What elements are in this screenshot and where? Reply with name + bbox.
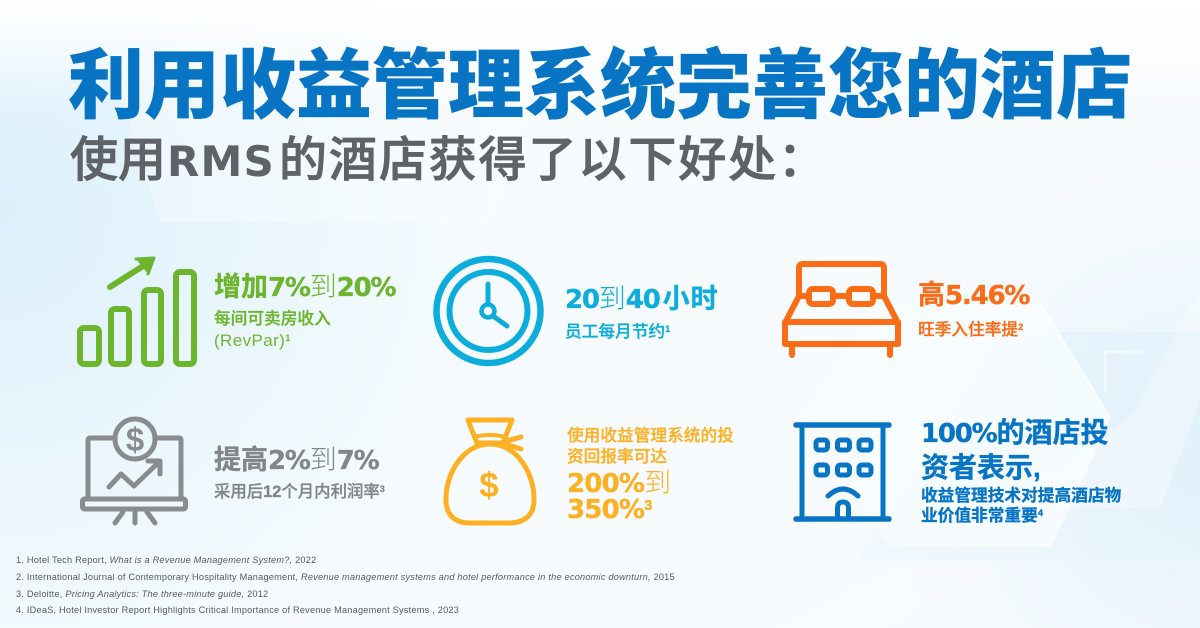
icon: presentation board with dollar: $ bbox=[126, 421, 144, 458]
text: RevPAR: (RevPar)1 bbox=[214, 331, 291, 350]
icon: hotel building bbox=[793, 422, 892, 522]
panel: occupancy bbox=[782, 261, 1030, 358]
text: roi intro: 资回报率可达 bbox=[567, 447, 667, 466]
heading: 100% of hotel investors bbox=[921, 417, 1109, 483]
footnote 2: 2. International Journal of Contemporary Hospitality Management, Revenue management systems and hotel performance in the economic downturn, 2015 bbox=[16, 572, 675, 582]
text: roi intro: 使用收益管理系统的投 bbox=[567, 426, 734, 445]
heading: 5.46% higher: 高5.46% bbox=[918, 280, 1029, 311]
text: RMS importance bbox=[921, 486, 1121, 525]
footnote 4: 4. IDeaS, Hotel Investor Report Highlights Critical Importance of Revenue Management Systems , 2023 bbox=[16, 605, 459, 615]
text: peak season occupancy: 旺季入住率提2 bbox=[918, 320, 1023, 339]
panel: staff hours saved bbox=[433, 256, 719, 366]
text: RMS importance: 业价值非常重要4 bbox=[921, 506, 1043, 525]
icon: presentation board with dollar bbox=[80, 416, 188, 526]
text: roi intro bbox=[567, 426, 734, 466]
text: margin after adoption: 采用后12个月内利润率3 bbox=[214, 483, 385, 501]
icon: bed bbox=[782, 261, 901, 358]
text: RMS importance: 收益管理技术对提高酒店物 bbox=[921, 486, 1121, 505]
icon: money bag bbox=[443, 418, 537, 526]
heading: 200% to 350%: 200%到 bbox=[567, 461, 671, 500]
heading: 2% to 7%: 提高2%到7% bbox=[214, 438, 378, 477]
heading: 100% of hotel investors: 100%的酒店投 bbox=[921, 417, 1109, 449]
heading: 100% of hotel investors: 资者表示, bbox=[921, 452, 1041, 483]
panel: revenue per room bbox=[77, 256, 396, 367]
subtitle: 使用RMS的酒店获得了以下好处： bbox=[70, 134, 828, 187]
panel: profit margin bbox=[80, 416, 385, 526]
text: RevPAR bbox=[214, 309, 331, 350]
footnote 1: 1. Hotel Tech Report, What is a Revenue Management System?, 2022 bbox=[16, 555, 316, 565]
panel: return on investment bbox=[443, 418, 734, 526]
footnotes bbox=[16, 555, 675, 615]
footnote 3: 3. Deloitte, Pricing Analytics: The three-minute guide, 2012 bbox=[16, 589, 268, 599]
icon: money bag: $ bbox=[479, 466, 499, 505]
title: 利用收益管理系统完善您的酒店 bbox=[68, 44, 1132, 129]
panel: investors bbox=[793, 417, 1121, 525]
heading: 200% to 350%: 350%3 bbox=[567, 495, 652, 525]
heading: 20 to 40 hours: 20到40小时 bbox=[565, 277, 719, 316]
text: RevPAR: 每间可卖房收入 bbox=[214, 309, 331, 328]
heading: 200% to 350% bbox=[567, 461, 671, 525]
icon: clock bbox=[433, 256, 544, 366]
icon: rising bars bbox=[77, 256, 197, 367]
text: monthly staff saving: 员工每月节约1 bbox=[565, 322, 670, 341]
heading: increase 7% to 20%: 增加7%到20% bbox=[214, 265, 395, 304]
